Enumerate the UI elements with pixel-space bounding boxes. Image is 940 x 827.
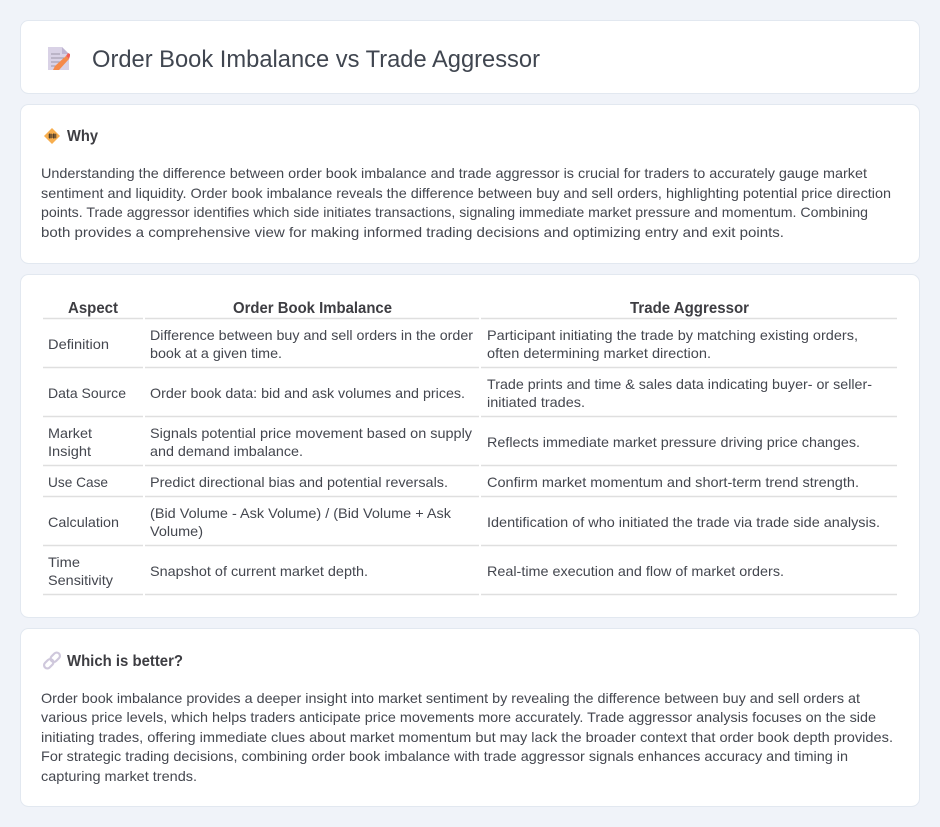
icon: memo with pencil (48, 47, 70, 70)
table row: market insight: Reflects immediate market pressure driving price changes. (487, 434, 860, 450)
table row: time sensitivity: Time (48, 554, 80, 570)
text block: which is better paragraph: various price levels, which helps traders anticipate price movements more accurately. Trade aggressor analysis focuses on the side (41, 709, 876, 725)
table row: definition: Participant initiating the trade by matching existing orders, (487, 327, 858, 343)
text block: which is better paragraph: initiating trades, offering immediate clues about market momentum but may lack the broader context that order book depth provides. (41, 729, 893, 745)
panel: why (20, 104, 920, 264)
table header row (43, 300, 897, 318)
table row: use case (43, 474, 897, 496)
table row: definition: Difference between buy and sell orders in the order (150, 327, 473, 343)
text block: which is better paragraph (41, 690, 893, 784)
table row: definition (43, 327, 897, 368)
table row: time sensitivity: Sensitivity (48, 572, 113, 588)
table row: definition: often determining market direction. (487, 345, 711, 361)
text block: which is better paragraph: For strategic trading decisions, combining order book imbalance with trade aggressor signals enhances accuracy and timing in (41, 748, 848, 764)
table row: calculation: Identification of who initiated the trade via trade side analysis. (487, 514, 880, 530)
table row: market insight: Insight (48, 443, 91, 459)
text block: why paragraph (41, 165, 891, 240)
table row: data source (43, 376, 897, 416)
table row: time sensitivity: Real-time execution and flow of market orders. (487, 563, 784, 579)
text block: why paragraph: sentiment and liquidity. Order book imbalance reveals the difference between buy and sell orders, highlighting potential price direction (41, 185, 891, 201)
table row: use case: Use Case (48, 474, 108, 490)
table row: data source: Data Source (48, 385, 126, 401)
table row: data source: Trade prints and time & sales data indicating buyer- or seller- (487, 376, 872, 392)
table row: use case: Confirm market momentum and short-term trend strength. (487, 474, 859, 490)
panel: which is better (20, 628, 920, 806)
table row: market insight: Signals potential price movement based on supply (150, 425, 472, 441)
text block: which is better paragraph: capturing market trends. (41, 768, 197, 784)
table row: calculation: Volume) (150, 523, 203, 539)
text block: why paragraph: points. Trade aggressor identifies which side initiates transactions, signaling immediate market pressure and momentum. Combining (41, 204, 868, 220)
table header row: Aspect (68, 300, 119, 317)
table row: market insight: Market (48, 425, 92, 441)
table row: time sensitivity: Snapshot of current market depth. (150, 563, 368, 579)
table row: market insight (43, 425, 897, 466)
text block: why paragraph: Understanding the difference between order book imbalance and trade aggressor is crucial for traders to accurately gauge market (41, 165, 867, 181)
table row: data source: initiated trades. (487, 394, 585, 410)
panel: title header (20, 20, 920, 94)
icon: warning diamond (44, 128, 60, 144)
text block: why paragraph: both provides a comprehensive view for making informed trading decisions and optimizing entry and exit points. (41, 224, 784, 240)
table row: calculation: (Bid Volume - Ask Volume) / (Bid Volume + Ask (150, 505, 452, 521)
table row: calculation (43, 505, 897, 546)
panel: comparison table (20, 274, 920, 618)
table row: definition: Definition (48, 336, 109, 352)
table row: data source: Order book data: bid and ask volumes and prices. (150, 385, 465, 401)
table header row: Order Book Imbalance (233, 300, 392, 317)
heading: why: Why (67, 128, 98, 145)
table row: use case: Predict directional bias and potential reversals. (150, 474, 448, 490)
table row: calculation: Calculation (48, 514, 119, 530)
title: Order Book Imbalance vs Trade Aggressor (92, 46, 540, 73)
table header row: Trade Aggressor (630, 300, 749, 317)
icon: link (43, 651, 61, 670)
table row: time sensitivity (43, 554, 897, 594)
table row: market insight: and demand imbalance. (150, 443, 303, 459)
text block: which is better paragraph: Order book imbalance provides a deeper insight into market sentiment by revealing the difference between buy and sell orders at (41, 690, 860, 706)
table row: definition: book at a given time. (150, 345, 282, 361)
heading: which is better: Which is better? (67, 653, 183, 670)
